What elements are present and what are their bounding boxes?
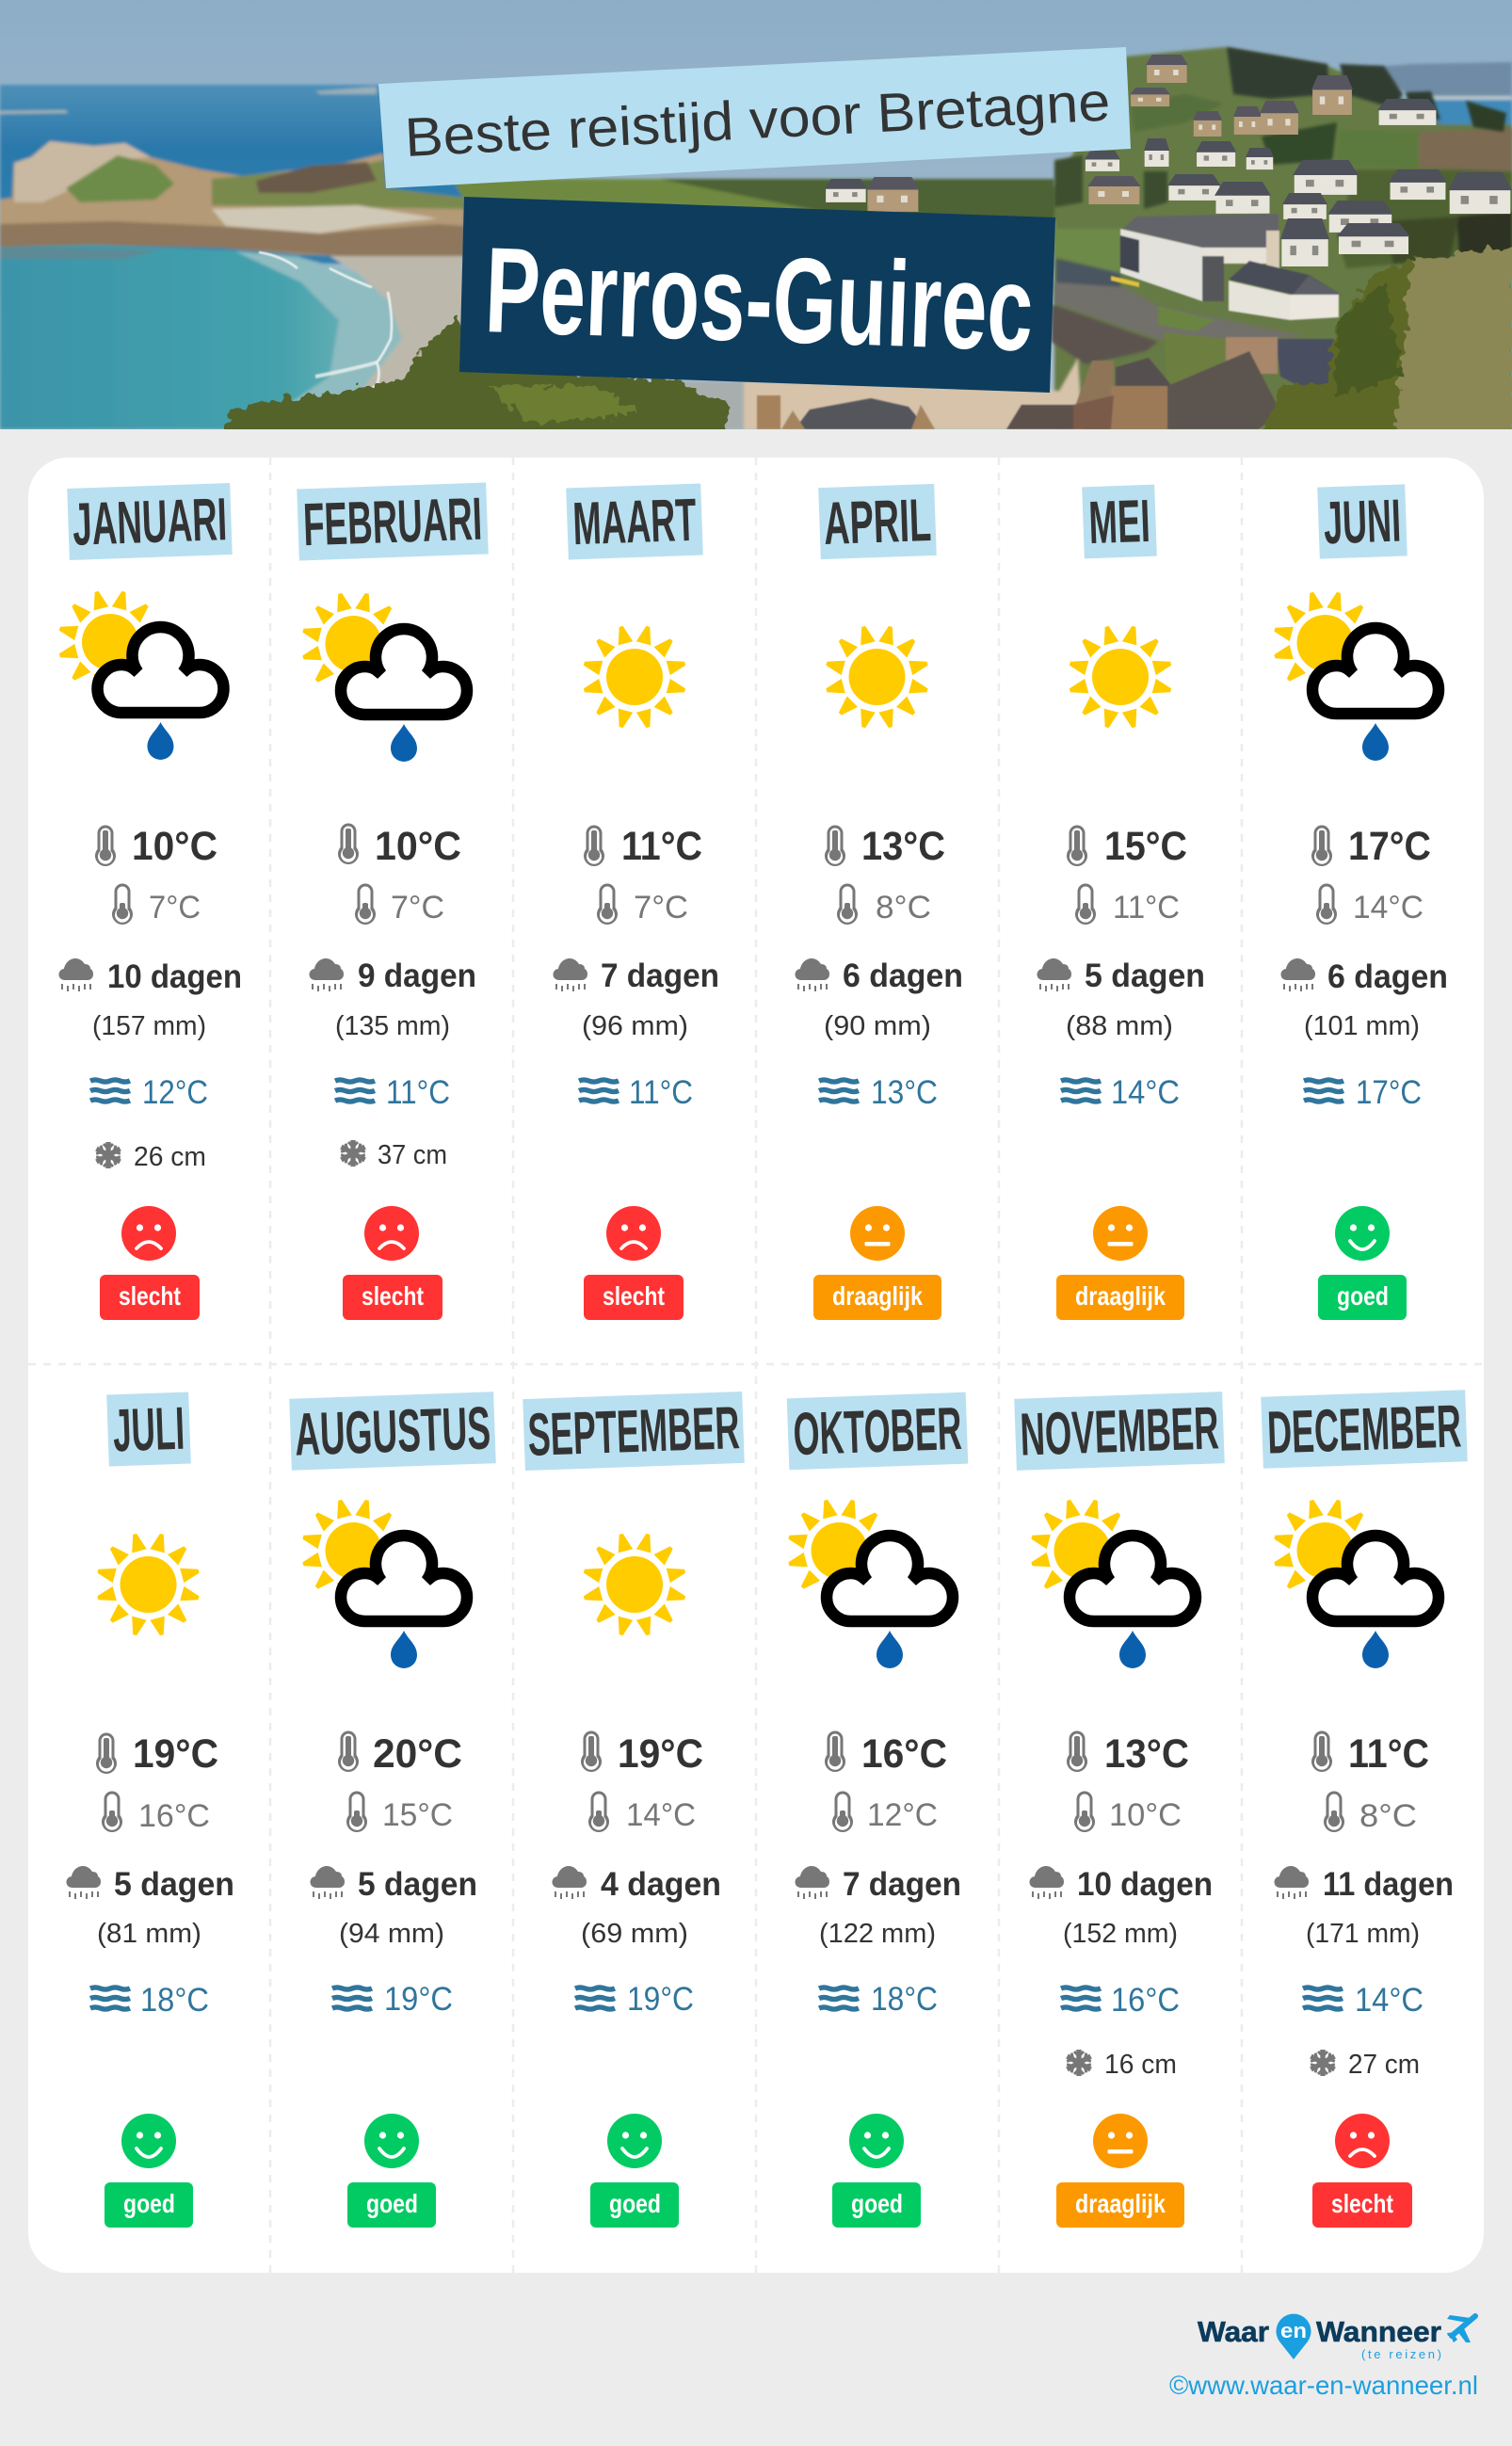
icon: min thermometer bbox=[588, 1791, 609, 1832]
rainfall: (88 mm) bbox=[1066, 1011, 1173, 1041]
icon: waves bbox=[575, 1987, 615, 2009]
icon: min thermometer bbox=[1324, 1791, 1344, 1832]
month label bbox=[523, 1392, 745, 1471]
rainfall: (152 mm) bbox=[1063, 1919, 1178, 1949]
rating badge bbox=[1056, 2182, 1184, 2228]
icon: snowflake bbox=[96, 1142, 121, 1168]
rating badge bbox=[1312, 2182, 1412, 2228]
sea temperature: 19°C bbox=[384, 1981, 453, 2018]
icon: rain cloud bbox=[552, 1866, 587, 1899]
rain days: 7 dagen bbox=[843, 1866, 961, 1903]
month label: MEI bbox=[1087, 487, 1151, 556]
icon: max thermometer bbox=[584, 825, 604, 866]
icon: rain cloud bbox=[1029, 1866, 1064, 1899]
rainfall: (122 mm) bbox=[819, 1919, 936, 1949]
month: oktober bbox=[787, 1392, 968, 2228]
rating badge bbox=[590, 2182, 679, 2228]
icon: rain cloud bbox=[1280, 958, 1315, 991]
icon: happy face bbox=[607, 2114, 662, 2168]
icon: airplane bbox=[1447, 2315, 1475, 2342]
month label bbox=[1082, 485, 1157, 558]
rain days: 4 dagen bbox=[601, 1866, 721, 1903]
icon: waves bbox=[332, 1987, 372, 2009]
icon: max thermometer bbox=[825, 1730, 845, 1772]
month: april bbox=[795, 484, 963, 1320]
rainfall: (157 mm) bbox=[92, 1011, 206, 1041]
max temperature: 10°C bbox=[375, 824, 461, 869]
min temperature: 10°C bbox=[1109, 1797, 1182, 1833]
month: maart bbox=[553, 484, 719, 1320]
rating badge: goed bbox=[1337, 1281, 1389, 1311]
panel: monthly climate table bbox=[28, 458, 1484, 2273]
icon: sun behind rain cloud bbox=[301, 591, 467, 762]
icon: sun bbox=[582, 1532, 687, 1637]
sea temperature: 11°C bbox=[629, 1074, 693, 1111]
min temperature: 15°C bbox=[382, 1797, 453, 1833]
icon: sun bbox=[96, 1532, 201, 1637]
month label bbox=[566, 484, 703, 559]
month label: JULI bbox=[112, 1394, 185, 1464]
icon: happy face bbox=[121, 2114, 176, 2168]
icon: max thermometer bbox=[1067, 825, 1087, 866]
icon: min thermometer bbox=[112, 883, 133, 925]
sea temperature: 16°C bbox=[1111, 1982, 1180, 2019]
rain days: 10 dagen bbox=[1077, 1866, 1213, 1903]
max temperature: 20°C bbox=[373, 1731, 462, 1777]
month label: AUGUSTUS bbox=[294, 1393, 491, 1469]
rating badge bbox=[584, 1275, 684, 1320]
sea temperature: 13°C bbox=[871, 1074, 938, 1111]
icon: happy face bbox=[849, 2114, 904, 2168]
icon: waves bbox=[335, 1080, 375, 1102]
icon: sad face bbox=[364, 1206, 419, 1261]
rating badge: draaglijk bbox=[1075, 2189, 1166, 2218]
rating badge: goed bbox=[123, 2189, 175, 2218]
rating badge: draaglijk bbox=[832, 1281, 923, 1311]
icon: sun behind rain cloud bbox=[1030, 1498, 1196, 1668]
logo: Waar en Wanneer: Wanneer bbox=[1316, 2315, 1441, 2348]
month: februari bbox=[297, 483, 489, 1320]
month: mei bbox=[1037, 485, 1205, 1320]
month label: OKTOBER bbox=[792, 1394, 963, 1468]
rain days: 6 dagen bbox=[1327, 958, 1448, 995]
min temperature: 7°C bbox=[634, 890, 688, 925]
sea temperature: 14°C bbox=[1355, 1982, 1424, 2019]
icon: min thermometer bbox=[837, 883, 858, 925]
icon: snowflake bbox=[341, 1140, 365, 1167]
icon: happy face bbox=[364, 2114, 419, 2168]
icon: max thermometer bbox=[825, 825, 845, 866]
icon: waves bbox=[90, 1987, 130, 2009]
icon: rain cloud bbox=[553, 958, 587, 991]
icon: min thermometer bbox=[1316, 883, 1337, 925]
month label bbox=[1317, 484, 1407, 559]
icon: waves bbox=[579, 1080, 619, 1102]
icon: rain cloud bbox=[58, 958, 93, 991]
month: november bbox=[1014, 1392, 1225, 2228]
rainfall: (135 mm) bbox=[335, 1011, 450, 1041]
max temperature: 11°C bbox=[1348, 1731, 1429, 1777]
month label bbox=[289, 1392, 496, 1471]
sea temperature: 19°C bbox=[627, 1981, 694, 2018]
max temperature: 17°C bbox=[1348, 824, 1431, 869]
max temperature: 13°C bbox=[861, 824, 945, 869]
month: januari bbox=[57, 483, 242, 1320]
rating badge: goed bbox=[366, 2189, 418, 2218]
snow depth: 27 cm bbox=[1348, 2050, 1420, 2080]
rating badge: slecht bbox=[603, 1281, 665, 1311]
rainfall: (81 mm) bbox=[97, 1919, 201, 1949]
icon: max thermometer bbox=[581, 1730, 602, 1772]
min temperature: 16°C bbox=[138, 1798, 210, 1834]
snow depth: 37 cm bbox=[378, 1140, 447, 1170]
icon: sun behind rain cloud bbox=[57, 589, 224, 760]
month label bbox=[106, 1392, 191, 1466]
rating badge bbox=[832, 2182, 921, 2228]
rating badge: slecht bbox=[1331, 2189, 1393, 2218]
rating badge: goed bbox=[609, 2189, 661, 2218]
website credit: ©www.waar-en-wanneer.nl bbox=[1169, 2371, 1478, 2400]
rating badge bbox=[1318, 1275, 1407, 1320]
rating badge bbox=[1056, 1275, 1184, 1320]
rating badge: goed bbox=[851, 2189, 903, 2218]
month label bbox=[787, 1392, 968, 1470]
month: juni bbox=[1273, 484, 1448, 1320]
max temperature: 13°C bbox=[1104, 1731, 1189, 1777]
icon: sun behind rain cloud bbox=[787, 1498, 953, 1668]
icon: sad face bbox=[121, 1206, 176, 1261]
max temperature: 11°C bbox=[621, 824, 702, 869]
icon: waves bbox=[819, 1987, 859, 2009]
month label bbox=[297, 483, 489, 560]
icon: min thermometer bbox=[346, 1791, 367, 1832]
sea temperature: 17°C bbox=[1356, 1074, 1422, 1111]
month label: JUNI bbox=[1323, 487, 1402, 556]
max temperature: 10°C bbox=[132, 824, 217, 869]
icon: max thermometer bbox=[1311, 825, 1332, 866]
icon: rain cloud bbox=[795, 1866, 829, 1899]
icon: sad face bbox=[1335, 2114, 1390, 2168]
rain days: 5 dagen bbox=[358, 1866, 477, 1903]
icon: max thermometer bbox=[1311, 1730, 1332, 1772]
snow depth: 26 cm bbox=[134, 1142, 206, 1172]
icon: neutral face bbox=[850, 1206, 905, 1261]
icon: happy face bbox=[1335, 1206, 1390, 1261]
icon: rain cloud bbox=[1037, 958, 1071, 991]
icon: waves bbox=[90, 1080, 130, 1102]
month: juli bbox=[66, 1392, 234, 2228]
rating badge bbox=[347, 2182, 436, 2228]
rain days: 10 dagen bbox=[107, 958, 242, 995]
snow depth: 16 cm bbox=[1104, 2050, 1177, 2080]
icon: map pin: en bbox=[1280, 2319, 1307, 2342]
logo: Waar en Wanneer: Waar bbox=[1198, 2315, 1269, 2348]
rainfall: (96 mm) bbox=[582, 1011, 688, 1041]
icon: neutral face bbox=[1093, 2114, 1148, 2168]
icon: waves bbox=[1303, 1987, 1343, 2009]
icon: rain cloud bbox=[795, 958, 829, 991]
min temperature: 12°C bbox=[867, 1797, 938, 1833]
rating badge: draaglijk bbox=[1075, 1281, 1166, 1311]
icon: rain cloud bbox=[1274, 1866, 1309, 1899]
icon: min thermometer bbox=[355, 883, 376, 925]
icon: min thermometer bbox=[832, 1791, 853, 1832]
max temperature: 16°C bbox=[861, 1731, 947, 1777]
rating badge bbox=[343, 1275, 442, 1320]
month label bbox=[1014, 1392, 1225, 1471]
icon: min thermometer bbox=[597, 883, 618, 925]
sea temperature: 18°C bbox=[871, 1981, 938, 2018]
rain days: 11 dagen bbox=[1323, 1866, 1454, 1903]
icon: rain cloud bbox=[310, 1866, 345, 1899]
icon: map pin bbox=[1277, 2314, 1311, 2359]
max temperature: 19°C bbox=[133, 1731, 218, 1777]
rainfall: (69 mm) bbox=[581, 1919, 688, 1949]
min temperature: 7°C bbox=[391, 890, 444, 925]
sea temperature: 18°C bbox=[140, 1982, 209, 2019]
month label: FEBRUARI bbox=[302, 485, 483, 558]
max temperature: 15°C bbox=[1104, 824, 1187, 869]
icon: waves bbox=[1061, 1987, 1101, 2009]
rainfall: (94 mm) bbox=[339, 1919, 444, 1949]
icon: neutral face bbox=[1093, 1206, 1148, 1261]
logo: Waar en Wanneer bbox=[1198, 2314, 1475, 2361]
min temperature: 7°C bbox=[149, 890, 201, 925]
logo: Waar en Wanneer: (te reizen) bbox=[1361, 2347, 1441, 2361]
month label: SEPTEMBER bbox=[526, 1393, 741, 1469]
rain days: 6 dagen bbox=[843, 957, 963, 994]
rating badge bbox=[100, 1275, 200, 1320]
min temperature: 8°C bbox=[1359, 1798, 1417, 1834]
month label: APRIL bbox=[823, 486, 932, 557]
sea temperature: 11°C bbox=[386, 1074, 450, 1111]
max temperature: 19°C bbox=[618, 1731, 703, 1777]
icon: sun behind rain cloud bbox=[1273, 590, 1439, 761]
sea temperature: 14°C bbox=[1111, 1074, 1180, 1111]
rain days: 5 dagen bbox=[1085, 957, 1205, 994]
rainfall: (101 mm) bbox=[1304, 1011, 1420, 1041]
icon: rain cloud bbox=[66, 1866, 101, 1899]
title banner bbox=[459, 197, 1055, 393]
rating badge: slecht bbox=[119, 1281, 181, 1311]
rating badge: slecht bbox=[362, 1281, 424, 1311]
icon: sun behind rain cloud bbox=[301, 1498, 467, 1668]
icon: waves bbox=[1061, 1080, 1101, 1102]
month label: MAART bbox=[571, 486, 698, 557]
month label: NOVEMBER bbox=[1019, 1393, 1220, 1469]
icon: min thermometer bbox=[1075, 883, 1096, 925]
icon: sun bbox=[582, 624, 687, 730]
title banner: Perros-Guirec bbox=[483, 222, 1036, 377]
rain days: 9 dagen bbox=[358, 957, 476, 994]
icon: max thermometer bbox=[338, 823, 359, 864]
icon: waves bbox=[1304, 1080, 1343, 1102]
icon: waves bbox=[819, 1080, 859, 1102]
icon: max thermometer bbox=[96, 1732, 117, 1774]
rain days: 5 dagen bbox=[114, 1866, 234, 1903]
month label bbox=[67, 483, 233, 560]
icon: rain cloud bbox=[309, 958, 344, 991]
header photo: coast of Perros-Guirec bbox=[0, 0, 1512, 443]
rating badge bbox=[813, 1275, 941, 1320]
subtitle banner bbox=[378, 47, 1131, 188]
month: augustus bbox=[289, 1392, 496, 2228]
icon: snowflake bbox=[1067, 2050, 1091, 2076]
min temperature: 14°C bbox=[626, 1797, 696, 1833]
icon: sad face bbox=[606, 1206, 661, 1261]
icon: snowflake bbox=[1311, 2050, 1335, 2076]
month label: JANUARI bbox=[72, 485, 228, 558]
icon: max thermometer bbox=[1067, 1730, 1087, 1772]
subtitle banner: Beste reistijd voor Bretagne bbox=[403, 71, 1112, 169]
icon: sun bbox=[1068, 624, 1173, 730]
icon: sun behind rain cloud bbox=[1273, 1498, 1439, 1668]
icon: min thermometer bbox=[102, 1791, 122, 1832]
min temperature: 14°C bbox=[1353, 890, 1424, 925]
icon: min thermometer bbox=[1074, 1791, 1095, 1832]
min temperature: 8°C bbox=[876, 890, 931, 925]
rainfall: (90 mm) bbox=[824, 1011, 931, 1041]
rainfall: (171 mm) bbox=[1306, 1919, 1420, 1949]
sea temperature: 12°C bbox=[142, 1074, 208, 1111]
month: september bbox=[523, 1392, 745, 2228]
icon: max thermometer bbox=[95, 825, 116, 866]
month label bbox=[818, 484, 937, 559]
rain days: 7 dagen bbox=[601, 957, 719, 994]
month: december bbox=[1261, 1390, 1468, 2228]
icon: sun bbox=[825, 624, 929, 730]
rating badge bbox=[105, 2182, 193, 2228]
icon: max thermometer bbox=[338, 1730, 359, 1772]
min temperature: 11°C bbox=[1113, 890, 1180, 925]
